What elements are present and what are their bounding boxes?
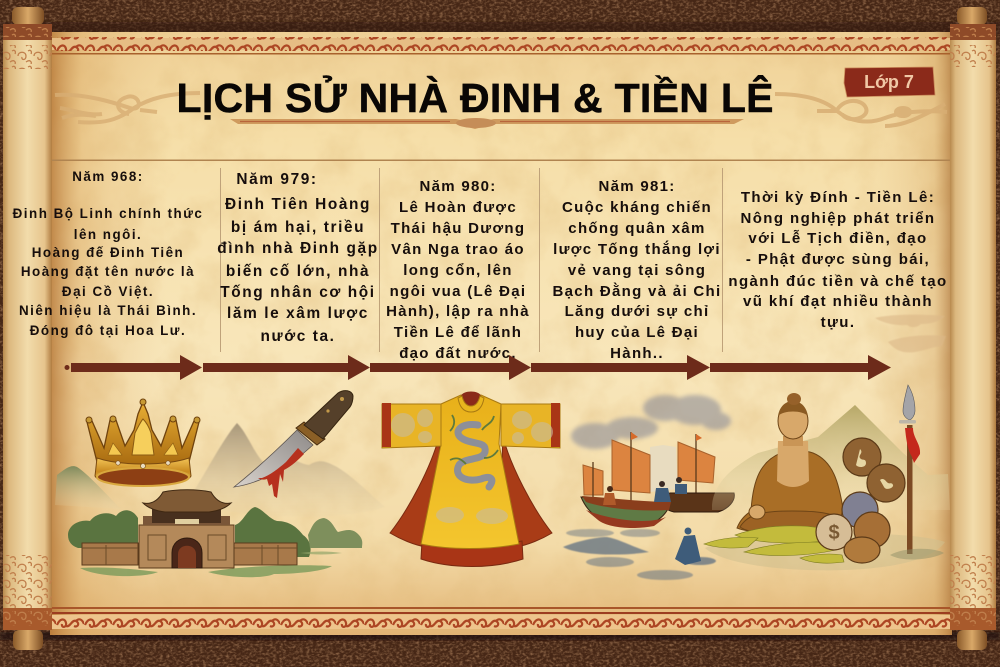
text: year 968: Hoàng đặt tên nước là (21, 264, 195, 279)
text: year 980: Năm 980: (419, 178, 497, 195)
illustration: coins: $ (828, 522, 840, 544)
text: year 979: lăm le xâm lược (227, 305, 369, 322)
text: Dinh - Tien Le period: Nông nghiệp phát triển (741, 210, 935, 227)
text: year 968: Đại Cồ Việt. (62, 284, 154, 299)
text: year 980: ngôi vua (Lê Đại (390, 283, 526, 300)
illustration: imperial dragon robe (382, 392, 560, 566)
illustration: rice sheaves (704, 526, 844, 563)
illustration: coins (816, 438, 905, 563)
illustration: spear with red tassel (890, 385, 944, 559)
text: Dinh - Tien Le period (728, 189, 948, 331)
top ornamental border (52, 37, 950, 54)
text: Dinh - Tien Le period: ngành đúc tiền và chế tạo (728, 273, 948, 290)
text: year 968: Đóng đô tại Hoa Lư. (30, 323, 186, 338)
illustration: mountains behind citadel (55, 423, 385, 517)
ornament: under-title bar (230, 118, 744, 129)
text: year 968: Hoàng đế Đinh Tiên (32, 245, 184, 260)
text: year 968 (13, 169, 203, 338)
text: year 980: Vân Nga trao áo (391, 241, 525, 258)
text: Dinh - Tien Le period: với Lễ Tịch điền, đạo (748, 230, 928, 247)
right scroll roller (950, 7, 996, 650)
text: year 981: Cuộc kháng chiến (562, 199, 712, 216)
text: year 980: long cổn, lên (403, 262, 513, 279)
text: year 979: đình nhà Đinh gặp (217, 240, 379, 257)
ornament: right title flourish (775, 94, 947, 126)
text: year 968: lên ngôi. (74, 227, 142, 242)
text: Dinh - Tien Le period: tựu. (821, 314, 855, 331)
text: year 979: biến cố lớn, nhà (226, 263, 370, 280)
text: year 968: Niên hiệu là Thái Bình. (19, 303, 197, 318)
text: year 980: Lê Hoàn được (399, 199, 517, 216)
text: year 981: Hành.. (610, 345, 664, 362)
text: year 981: Bạch Đằng và ải Chi (553, 282, 721, 300)
title: LỊCH SỬ NHÀ ĐINH & TIỀN LÊ (176, 75, 774, 121)
text: year 979: Tống nhân cơ hội (220, 284, 376, 301)
ornament: faint clouds right (875, 315, 946, 352)
illustration: warships on the Bach Dang river (563, 395, 734, 580)
text: year 980: Tiền Lê để lãnh (394, 324, 522, 341)
text: year 981: huy của Lê Đại (575, 324, 699, 341)
text: year 980: Hành), lập ra nhà (386, 303, 530, 320)
horizontal divider under header (52, 160, 950, 161)
text: Dinh - Tien Le period: vũ khí đạt nhiều thành (743, 293, 933, 310)
text: year 979 (217, 171, 379, 345)
badge: grade: Lớp 7 (864, 72, 914, 92)
text: Dinh - Tien Le period: - Phật được sùng bái, (746, 251, 930, 268)
illustration: citadel with trees (68, 490, 362, 577)
text: year 981 (553, 178, 721, 362)
left scroll roller (3, 7, 52, 650)
badge: grade (844, 67, 935, 97)
text: year 968: Đinh Bộ Linh chính thức (13, 206, 203, 221)
text: year 981: lược Tống thắng lợi (553, 240, 721, 258)
ornament: left title flourish (55, 93, 200, 122)
text: year 980: đạo đất nước. (399, 345, 517, 362)
illustration: bloody knife (234, 391, 353, 498)
text: Dinh - Tien Le period: Thời kỳ Đính - Tiền Lê: (741, 189, 935, 206)
column dividers (220, 168, 722, 352)
bottom ornamental border (52, 607, 950, 629)
text: year 979: Năm 979: (236, 171, 318, 188)
text: year 968: Năm 968: (72, 169, 144, 184)
text: year 981: chống quân xâm (568, 220, 706, 237)
text: year 981: vẻ vang tại sông (568, 262, 706, 279)
text: year 980 (386, 178, 530, 362)
illustration: golden crown (86, 399, 200, 486)
timeline arrows (64, 355, 891, 380)
text: year 979: bị ám hại, triều (231, 219, 365, 236)
text: year 981: Lăng dưới sự chỉ (565, 303, 709, 320)
illustration: Buddha statue with rice field (705, 393, 950, 570)
text: year 981: Năm 981: (598, 178, 676, 195)
text: year 980: Thái hậu Dương (391, 220, 525, 237)
text: year 979: Đinh Tiên Hoàng (225, 196, 371, 213)
text: year 979: nước ta. (260, 328, 336, 345)
